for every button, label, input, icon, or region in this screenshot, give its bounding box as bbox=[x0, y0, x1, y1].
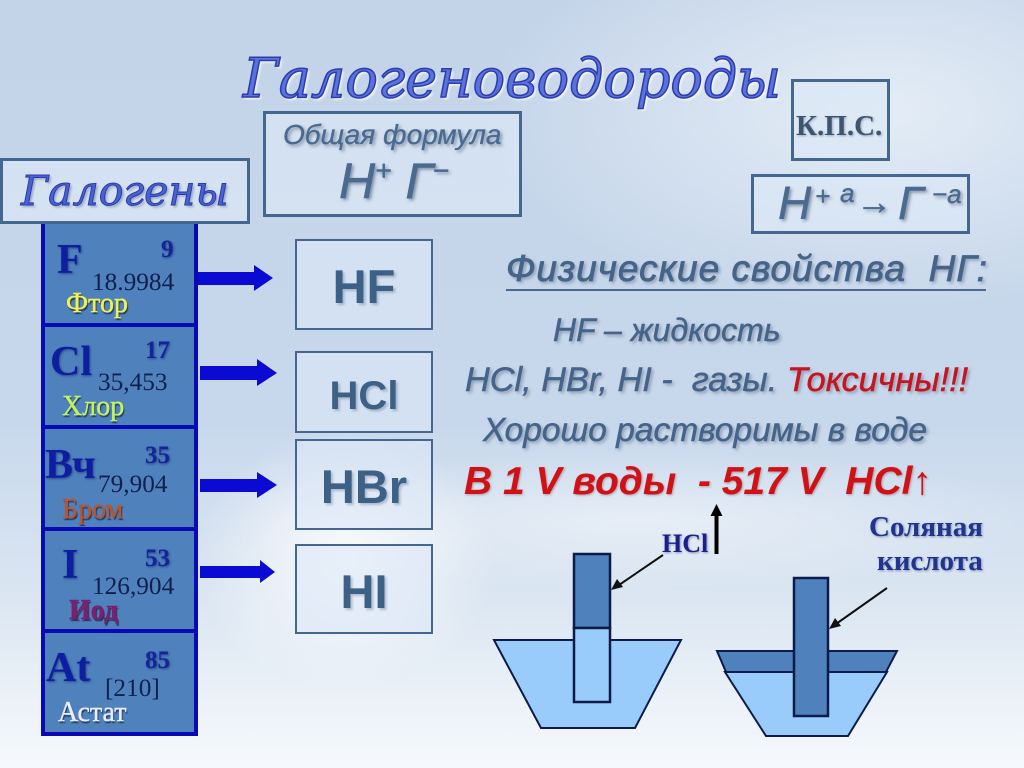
name: Бром bbox=[62, 494, 123, 525]
text: HF liquid: HF – жидкость bbox=[553, 312, 781, 348]
arrow: F to HF bbox=[198, 265, 273, 291]
bond formula text: → bbox=[856, 181, 892, 222]
panel: general formula bbox=[263, 111, 522, 217]
panel: К.П.С. bbox=[791, 79, 890, 161]
panel: polar bond formula bbox=[751, 174, 970, 234]
bond formula text bbox=[778, 177, 964, 229]
mass: 18.9984 bbox=[92, 268, 174, 296]
label К.П.С.: К.П.С. bbox=[796, 110, 882, 142]
box: HI bbox=[295, 544, 433, 634]
cell: chlorine bbox=[41, 323, 198, 429]
name: Хлор bbox=[62, 391, 124, 422]
bond formula text: + bbox=[815, 181, 830, 211]
symbol Cl: Cl bbox=[50, 339, 92, 385]
cell: iodine bbox=[41, 527, 198, 633]
basin: right acid layer bbox=[717, 651, 897, 672]
text: gases and toxic: HCl, HBr, HI - газы. Токсичны!!! bbox=[465, 361, 968, 399]
number 35: 35 bbox=[145, 442, 170, 469]
label hydrochloric acid: кислота bbox=[877, 545, 983, 577]
symbol I: I bbox=[62, 542, 78, 588]
panel: periodic table column bbox=[41, 224, 198, 736]
basin: left water bbox=[494, 640, 681, 728]
basin: right water bbox=[725, 672, 887, 736]
box: HCl bbox=[295, 351, 433, 433]
cell: fluorine bbox=[41, 224, 198, 327]
arrow: gas rising bbox=[710, 504, 722, 554]
box: HCl: HCl bbox=[330, 374, 398, 418]
box: HF bbox=[295, 239, 433, 330]
heading Галогены: Галогены bbox=[21, 167, 229, 215]
diagram: water dissolving experiment bbox=[492, 504, 984, 737]
name: Иод bbox=[69, 595, 118, 626]
bond formula text: −а bbox=[932, 179, 962, 209]
box: HBr bbox=[295, 439, 433, 530]
tube: left water bbox=[574, 628, 610, 702]
bond formula text: Г bbox=[898, 177, 923, 229]
number 9: 9 bbox=[161, 236, 174, 263]
arrow: to HCl bbox=[611, 555, 663, 590]
panel: halogens header bbox=[0, 158, 250, 224]
label hydrochloric acid bbox=[869, 511, 983, 577]
formula H+ Г-: Н+ Г− bbox=[339, 153, 449, 209]
heading: physical properties: Физические свойства НГ: bbox=[506, 248, 988, 289]
label hydrochloric acid: Соляная bbox=[869, 511, 983, 543]
number 85: 85 bbox=[145, 647, 170, 674]
box: HBr: HBr bbox=[321, 460, 407, 513]
mass: 79,904 bbox=[98, 470, 168, 498]
mass: 35,453 bbox=[98, 368, 168, 396]
text: solubility value: В 1 V воды - 517 V HCl↑ bbox=[464, 460, 932, 503]
bond formula text: Н bbox=[778, 177, 811, 229]
mass: [210] bbox=[105, 674, 160, 702]
cell: bromine bbox=[41, 425, 198, 531]
number 17: 17 bbox=[145, 337, 170, 364]
arrow: to acid bbox=[829, 588, 887, 629]
box: HI: HI bbox=[340, 565, 388, 618]
label HCl: HCl bbox=[662, 529, 708, 558]
symbol Br: Вч bbox=[45, 442, 96, 488]
box: HF: HF bbox=[333, 260, 395, 313]
tube: left gas bbox=[574, 554, 610, 628]
arrow: I to HI bbox=[200, 560, 275, 583]
arrow: Br to HBr bbox=[200, 472, 277, 498]
tube: right acid bbox=[794, 578, 828, 716]
arrow: Cl to HCl bbox=[200, 359, 277, 386]
formula caption: Общая формула bbox=[283, 119, 501, 150]
bond formula text: а bbox=[840, 178, 854, 208]
symbol At: At bbox=[46, 645, 90, 691]
symbol F: F bbox=[57, 237, 83, 283]
title: Галогеноводороды bbox=[243, 47, 781, 110]
number 53: 53 bbox=[145, 545, 170, 572]
name: Астат bbox=[58, 697, 126, 728]
cell: astatine bbox=[41, 629, 198, 736]
name: Фтор bbox=[66, 288, 128, 319]
text: soluble in water: Хорошо растворимы в воде bbox=[483, 412, 927, 449]
mass: 126,904 bbox=[92, 572, 174, 600]
